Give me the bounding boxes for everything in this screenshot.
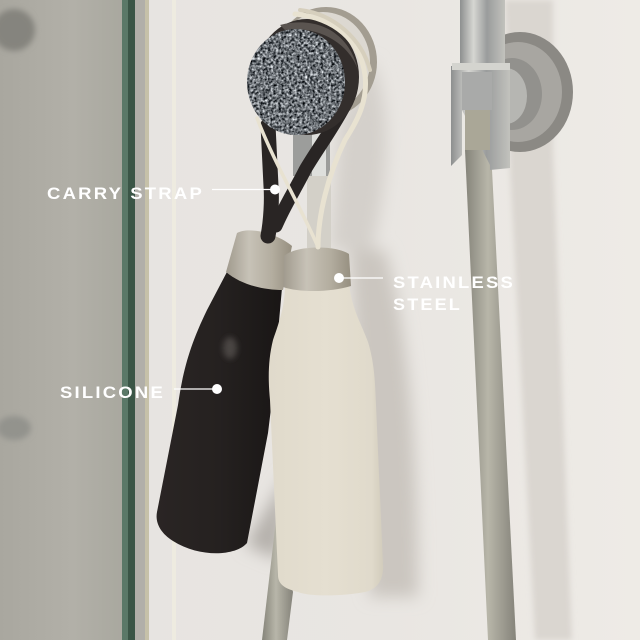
shower hose right [465,150,516,640]
black bottle [157,230,292,553]
shower pipe top [460,0,505,68]
callout: silicone: SILICONE [60,384,165,402]
black carry straps [268,105,345,236]
wall shadows [245,60,418,597]
callout: silicone [60,384,222,402]
round disc with black band [247,19,359,135]
callout: stainless steel [334,273,515,314]
callout: carry strap [47,184,280,203]
shower door: glass and frame [0,0,176,640]
callout: stainless steel: STAINLESS [393,274,515,292]
shower bracket rosette [467,32,573,152]
cream bottle [269,247,383,595]
cream bottle steel cap [283,247,351,291]
callout: carry strap: CARRY STRAP [47,185,204,203]
black bottle steel cap [226,230,292,290]
cream carry strap [257,10,370,247]
shower clamp [451,63,510,170]
right wall shadow strip [505,0,572,640]
hook and pipes [275,7,377,248]
callout: stainless steel: STEEL [393,296,462,314]
shower hose lower left [262,520,293,640]
